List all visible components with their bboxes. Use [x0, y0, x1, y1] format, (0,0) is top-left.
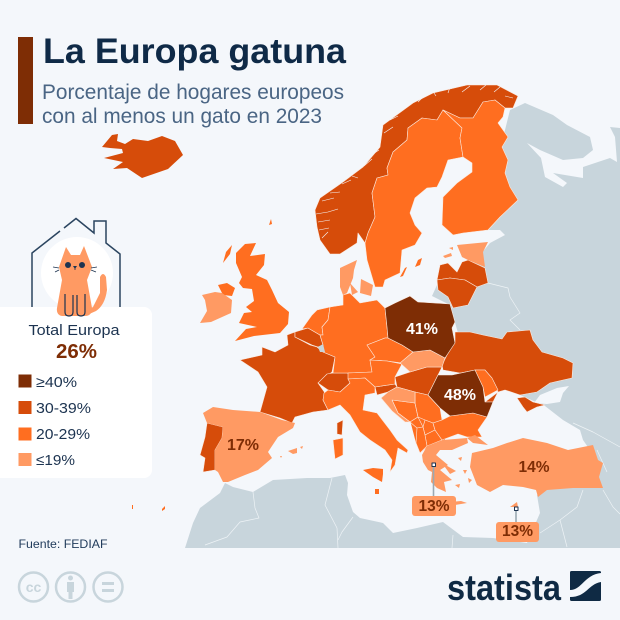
Czechia — [367, 338, 413, 363]
countries 19 percent or less — [200, 242, 603, 507]
Latvia — [437, 260, 488, 287]
Sicily — [363, 468, 383, 482]
Crimea — [517, 397, 545, 412]
Poland — [385, 296, 455, 358]
value label: Cyprus — [496, 522, 539, 542]
Canary Islands — [132, 505, 165, 511]
legend item: 19 and under: ≤19% — [36, 452, 75, 469]
Malta — [375, 489, 379, 494]
Netherlands — [302, 307, 330, 335]
Hungary — [395, 367, 442, 395]
value label: Spain: 17% — [227, 437, 259, 454]
Balearic Islands — [280, 446, 303, 458]
Oland — [400, 267, 407, 277]
cat tail — [83, 274, 107, 315]
cat body — [57, 246, 92, 316]
icon: white circle behind cat — [41, 237, 113, 309]
value label: Poland: 41% — [406, 321, 438, 338]
Finland — [442, 100, 518, 235]
legend total value: 26% — [56, 341, 97, 363]
legend item: 40 and over — [18, 374, 77, 391]
Serbia — [415, 392, 442, 423]
Bosnia — [392, 400, 418, 422]
grey borders — [205, 283, 620, 548]
Slovenia — [375, 384, 397, 395]
countries 20-29 percent — [218, 100, 518, 494]
Iceland — [102, 134, 183, 178]
non-data land in grey — [185, 103, 620, 548]
Greece mainland — [422, 438, 468, 492]
value label: Romania: 48% — [444, 387, 476, 404]
Kosovo — [423, 420, 435, 435]
Turkey European part — [467, 435, 488, 445]
North Macedonia — [425, 430, 442, 446]
Sardinia — [333, 438, 343, 459]
Lithuania — [437, 278, 477, 308]
Moldova — [475, 370, 498, 397]
subtitle: Porcentaje de hogares europeos — [42, 81, 344, 104]
Cyprus — [510, 502, 518, 507]
Estonia — [457, 242, 488, 267]
icon: house outline — [32, 218, 120, 308]
Sweden — [365, 110, 463, 287]
Aegean islands — [442, 457, 472, 505]
icon: cat — [53, 246, 107, 316]
Corsica — [337, 420, 343, 435]
legend item: 20-29: 20-29% — [36, 426, 90, 443]
countries 40 percent or more — [385, 296, 493, 417]
Austria — [348, 360, 402, 387]
source: Fuente: FEDIAF — [18, 537, 108, 551]
legend item: 30-39: 30-39% — [36, 400, 91, 417]
Balkan backing fill — [410, 415, 445, 453]
sea of Azov — [534, 386, 569, 404]
Switzerland — [318, 373, 350, 392]
Luxembourg — [318, 344, 325, 352]
Denmark — [340, 260, 373, 296]
Bulgaria — [433, 413, 487, 440]
cat face — [53, 262, 97, 272]
map of Europe — [102, 85, 620, 548]
value label: Cyprus: 13% — [502, 523, 533, 540]
legend item: 19 and under — [18, 452, 75, 469]
Gotland — [415, 258, 422, 267]
Hebrides — [223, 245, 232, 263]
subtitle — [42, 81, 344, 128]
Portugal — [200, 423, 223, 472]
legend item: 40 and over: ≥40% — [36, 374, 77, 391]
Albania — [416, 427, 427, 453]
Spain — [203, 407, 295, 482]
countries 30-39 percent — [102, 85, 573, 472]
icon: creative commons — [19, 572, 122, 602]
statista wordmark: statista — [447, 567, 562, 608]
Cyprus value leader line — [515, 510, 517, 523]
Turkey — [470, 438, 603, 497]
value label: Greece: 13% — [418, 498, 450, 515]
Croatia — [381, 387, 415, 422]
Norwegian fjords — [316, 85, 513, 238]
cat legs — [65, 294, 85, 316]
title accent bar — [18, 37, 33, 124]
statista logo — [570, 571, 601, 601]
Budjak — [485, 392, 498, 402]
Estonian islands — [443, 247, 453, 258]
United Kingdom — [235, 243, 289, 341]
Belgium — [295, 328, 323, 347]
Greece value leader line — [432, 465, 434, 497]
Romania — [428, 370, 493, 417]
Cyprus marker — [514, 507, 518, 510]
Montenegro — [410, 417, 423, 428]
Northern Ireland — [218, 283, 235, 296]
Greece marker — [432, 463, 436, 466]
Ireland — [200, 292, 232, 323]
France — [240, 332, 335, 423]
Italy — [323, 378, 408, 472]
Ukraine — [442, 330, 573, 395]
legend card — [0, 307, 152, 478]
icon: creative commons: cc — [26, 579, 41, 595]
title: La Europa gatuna — [43, 32, 347, 71]
value label: Greece — [412, 496, 456, 516]
Germany — [320, 293, 388, 373]
subtitle: con al menos un gato en 2023 — [42, 105, 322, 128]
Norway — [315, 85, 518, 254]
legend total label: Total Europa — [28, 322, 120, 339]
Shetland — [269, 219, 272, 225]
Slovakia — [400, 350, 445, 372]
value label: Turkey: 14% — [518, 459, 550, 476]
